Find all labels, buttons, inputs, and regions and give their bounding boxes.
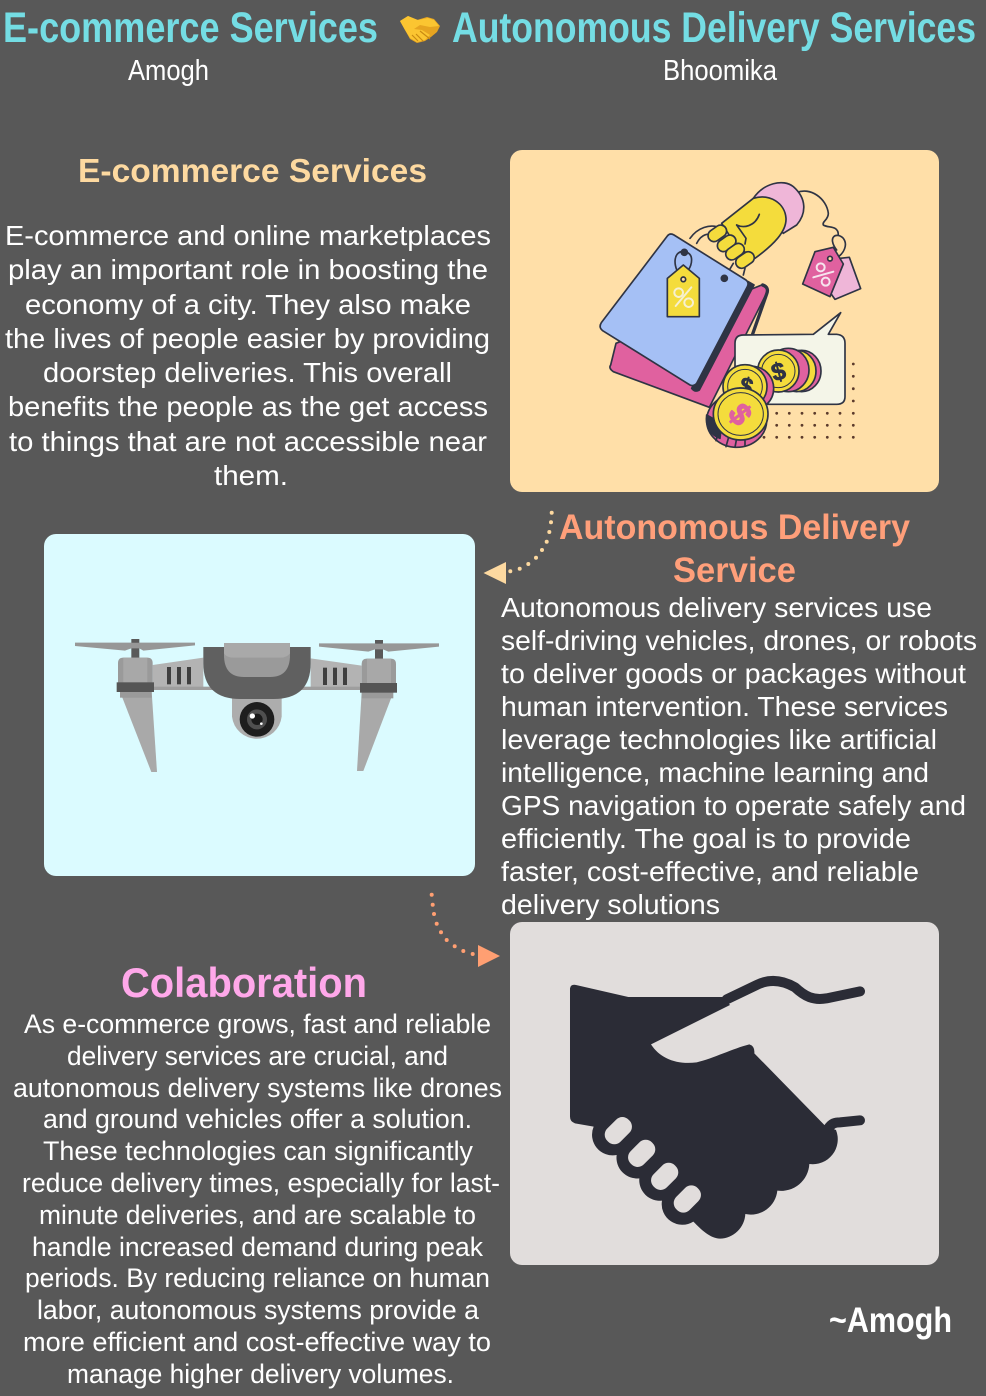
text block: autonomous delivery description: faster, cost-effective, and reliable (501, 856, 919, 887)
text block: collaboration description: handle increased demand during peak (32, 1232, 483, 1262)
text block: collaboration description: more efficient and cost-effective way to (23, 1327, 491, 1357)
heading: Autonomous Delivery Service: Autonomous Delivery (559, 508, 911, 547)
text block: autonomous delivery description: self-driving vehicles, drones, or robots (501, 625, 977, 656)
text block: collaboration description: These technologies can significantly (43, 1136, 473, 1166)
text block: collaboration description: minute deliveries, and are scalable to (39, 1200, 476, 1230)
text block: e-commerce description: economy of a city. They also make (25, 289, 471, 320)
icon: handshake (570, 981, 860, 1239)
signature: ~Amogh (829, 1301, 952, 1340)
icon: shopping bags, tags and coins: $ (721, 397, 759, 432)
text block: e-commerce description: to things that are not accessible near (9, 426, 487, 457)
text block: autonomous delivery description: leverage technologies like artificial (501, 724, 937, 755)
icon: dot pattern (763, 363, 855, 439)
title: E-commerce Services (3, 4, 378, 52)
text block: e-commerce description: doorstep deliveries. This overall (43, 357, 452, 388)
text block: collaboration description: manage higher delivery volumes. (67, 1359, 454, 1389)
text block: collaboration description: and ground vehicles offer a solution. (43, 1104, 472, 1134)
text block: collaboration description: As e-commerce grows, fast and reliable (24, 1009, 491, 1039)
text block: collaboration description: reduce delivery times, especially for last- (22, 1168, 500, 1198)
text block: autonomous delivery description: human intervention. These services (501, 691, 948, 722)
icon: shopping bags, tags and coins: $ (769, 358, 789, 387)
text block: autonomous delivery description: efficiently. The goal is to provide (501, 823, 911, 854)
text block: e-commerce description: E-commerce and online marketplaces (5, 220, 491, 251)
title (3, 4, 976, 52)
text block: e-commerce description: them. (214, 460, 288, 491)
heading: Autonomous Delivery Service: Service (673, 551, 796, 590)
text block: collaboration description: delivery services are crucial, and (67, 1041, 448, 1071)
heading: Colaboration: Colaboration (121, 959, 367, 1006)
heading: Autonomous Delivery Service (559, 508, 911, 590)
author: Amogh: Amogh (128, 55, 209, 87)
icon: drone (75, 639, 439, 772)
text block: autonomous delivery description: intelligence, machine learning and (501, 757, 929, 788)
text block: collaboration description: autonomous delivery systems like drones (13, 1073, 502, 1103)
arrow: dotted arrow to handshake panel (430, 893, 500, 967)
text block: e-commerce description: the lives of people easier by providing (5, 323, 490, 354)
text block: e-commerce description: benefits the people as the get access (8, 391, 488, 422)
heading: E-commerce Services: E-commerce Services (78, 152, 427, 189)
author: Bhoomika: Bhoomika (663, 55, 778, 87)
icon: shopping bags, tags and coins: $ (737, 372, 756, 400)
text block: e-commerce description: play an important role in boosting the (8, 254, 488, 285)
text block: autonomous delivery description: Autonomous delivery services use (501, 592, 932, 623)
arrow: dotted arrow to drone panel (484, 511, 554, 584)
panel: shopping illustration (510, 150, 939, 492)
text block: autonomous delivery description: GPS navigation to operate safely and (501, 790, 966, 821)
text block: autonomous delivery description (501, 592, 977, 920)
text block: autonomous delivery description: to deliver goods or packages without (501, 658, 966, 689)
panel: handshake illustration (510, 922, 939, 1265)
text block: collaboration description: labor, autonomous systems provide a (37, 1295, 480, 1325)
text block: collaboration description: periods. By reducing reliance on human (25, 1263, 490, 1293)
text block: e-commerce description (5, 220, 491, 491)
text block: collaboration description (13, 1009, 502, 1389)
panel: drone illustration (44, 534, 475, 876)
icon: shopping bags, tags and coins (600, 183, 861, 447)
text block: autonomous delivery description: delivery solutions (501, 889, 720, 920)
icon: handshake emoji (400, 16, 440, 43)
